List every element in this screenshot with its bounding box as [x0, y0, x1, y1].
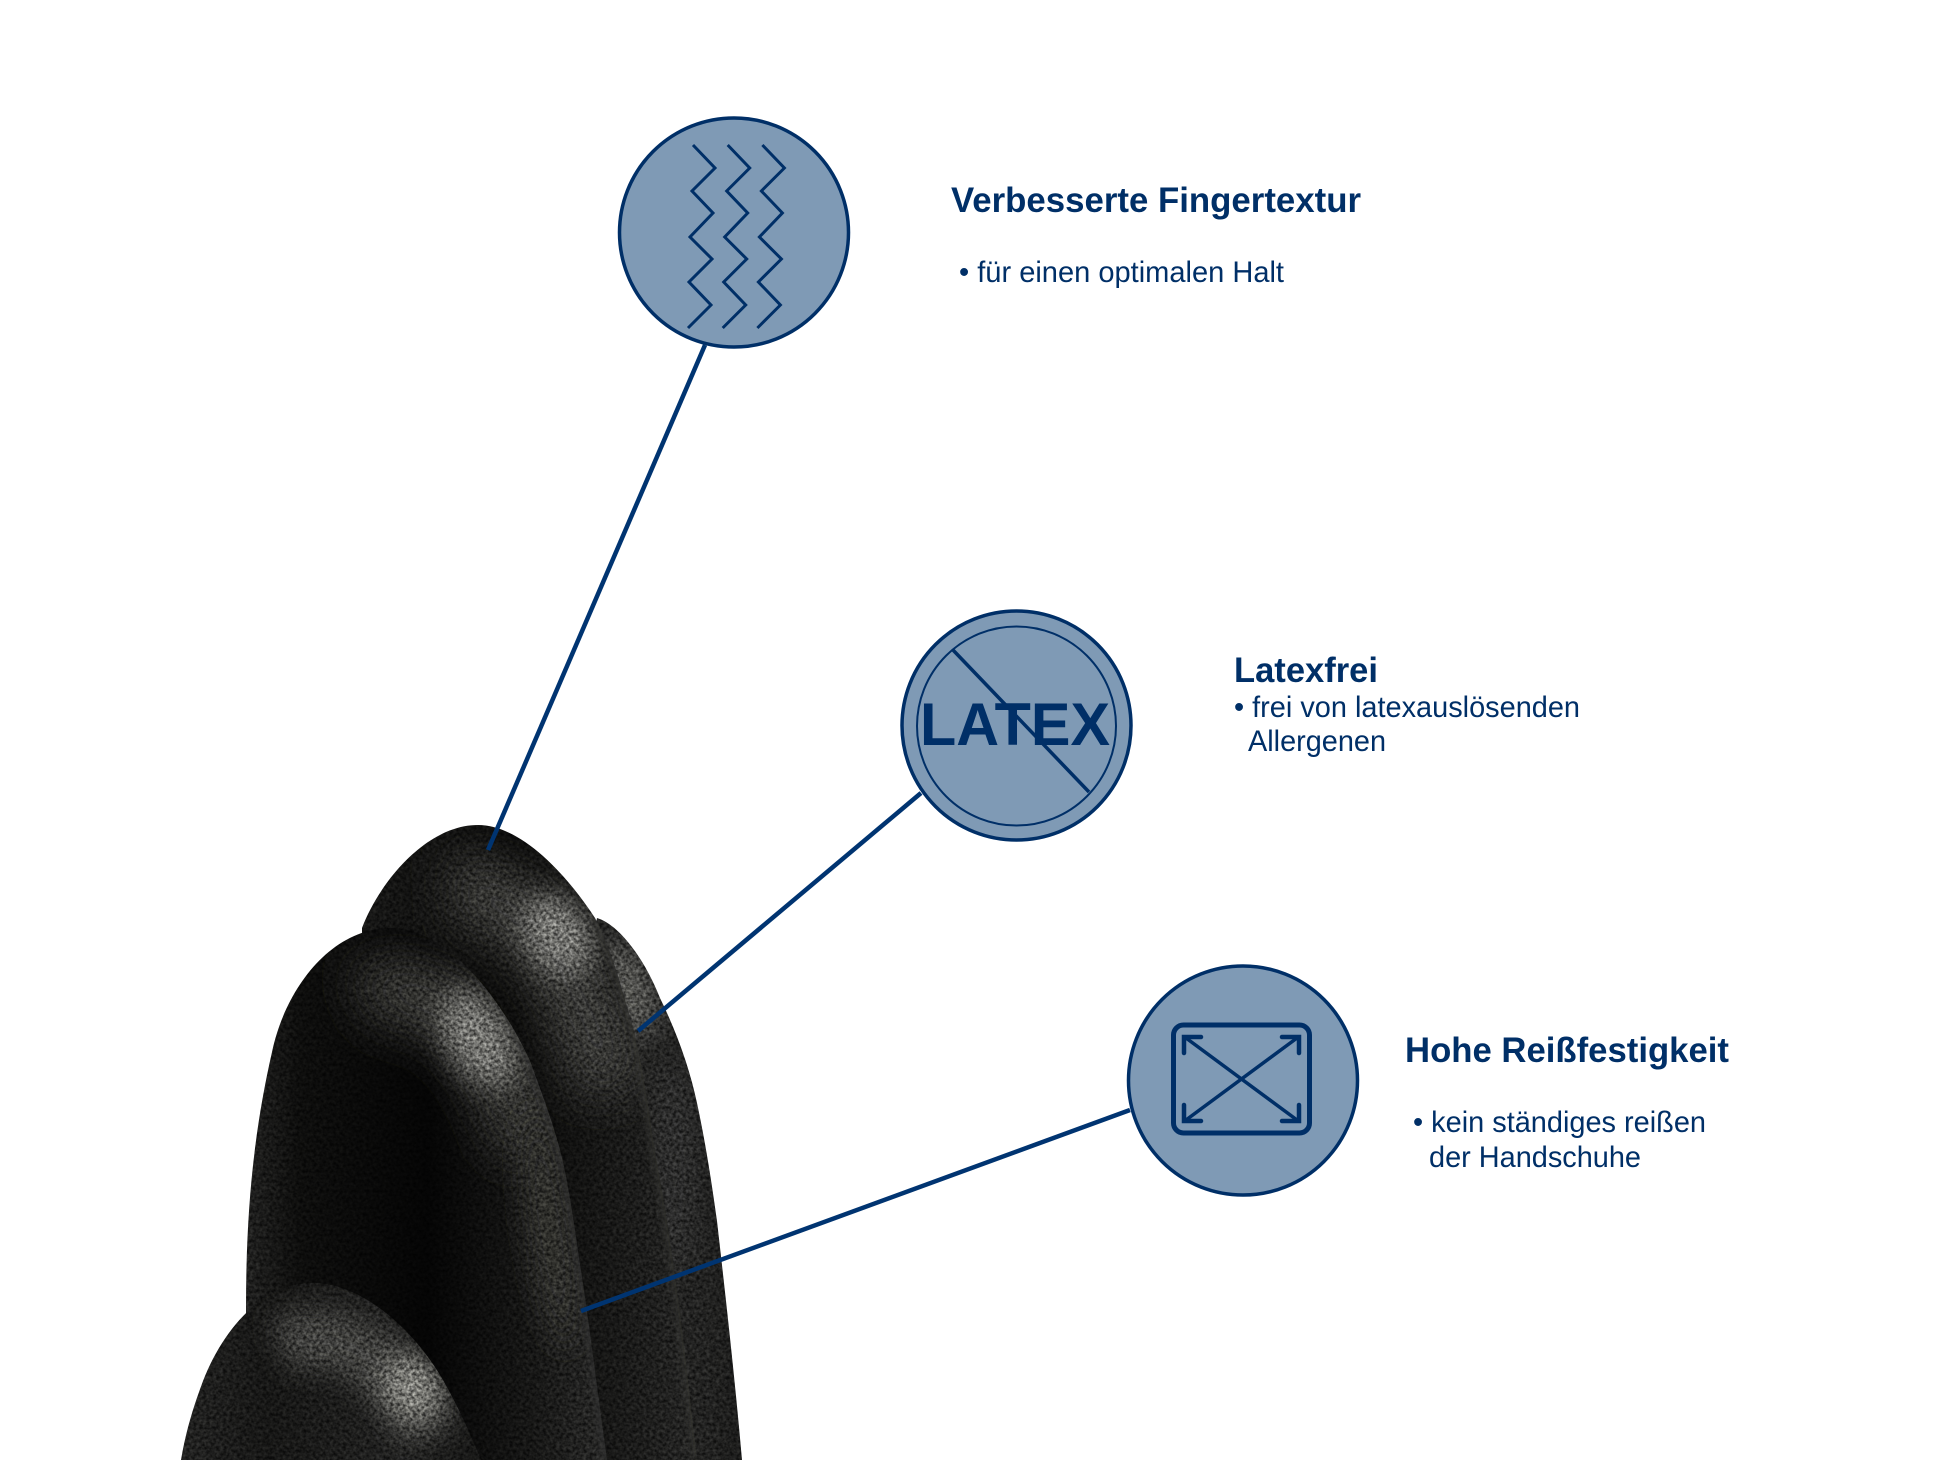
heading: Verbesserte Fingertextur: Verbesserte Fingertextur: [951, 181, 1361, 220]
heading: Latexfrei: Latexfrei: [1234, 651, 1378, 690]
finger: front: [240, 920, 615, 1460]
finger: front low: [175, 1280, 485, 1460]
icon: latex free: LATEX: [920, 691, 1110, 758]
icon: tear strength: [1128, 966, 1358, 1195]
text: kein ständiges reißen der Handschuhe: der Handschuhe: [1429, 1141, 1641, 1174]
finger: middle: [355, 820, 705, 1460]
connector line: tear strength: [581, 1110, 1130, 1311]
text: für einen optimalen Halt: • für einen optimalen Halt: [959, 256, 1284, 289]
text: frei von latexauslösenden Allergenen: • frei von latexauslösenden: [1234, 691, 1580, 724]
icon: latex free: [902, 611, 1131, 840]
text: frei von latexauslösenden Allergenen: [1234, 691, 1580, 758]
glove photo: [175, 820, 760, 1460]
text: kein ständiges reißen der Handschuhe: [1413, 1106, 1706, 1174]
heading: Hohe Reißfestigkeit: Hohe Reißfestigkeit: [1405, 1031, 1729, 1070]
connector line: latex free: [638, 793, 921, 1031]
text: frei von latexauslösenden Allergenen: Allergenen: [1248, 725, 1386, 758]
finger: back right: [596, 918, 742, 1460]
connector line: finger texture: [488, 345, 705, 850]
text: kein ständiges reißen der Handschuhe: • kein ständiges reißen: [1413, 1106, 1706, 1139]
icon: finger texture: [620, 118, 848, 347]
